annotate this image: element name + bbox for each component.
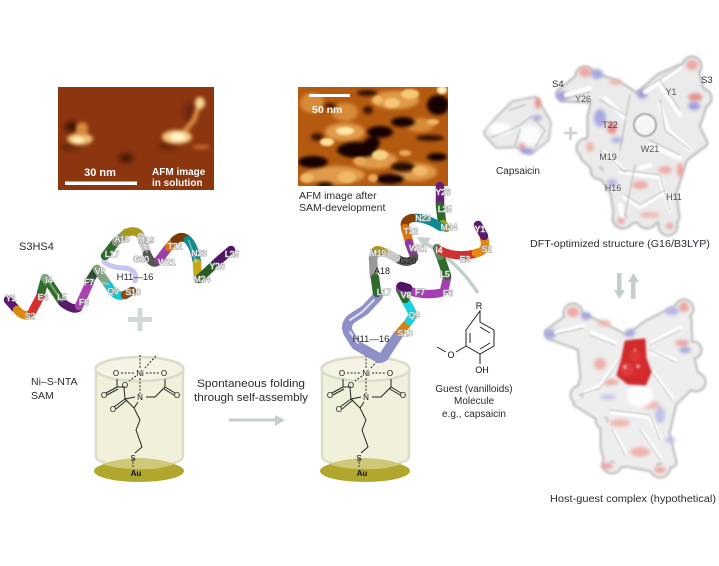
- icon: plus sign left: [128, 308, 152, 331]
- residue labels on surface: H16: [605, 183, 621, 193]
- residue labels: M24: [441, 222, 458, 232]
- label: capsaicin: Capsaicin: [496, 166, 540, 177]
- surface: host-guest complex: [544, 302, 702, 474]
- guest capsaicin: red surface: [618, 340, 650, 384]
- caption: AFM image after SAM-development: SAM-development: [299, 202, 385, 214]
- residue labels on surface: [575, 87, 682, 202]
- arrow: equilibrium down: [614, 273, 625, 299]
- molecule: NTA ligand: O: [113, 369, 119, 378]
- residue labels on surface: W21: [641, 144, 659, 154]
- caption: guest molecule: e.g., capsaicin: [442, 409, 506, 420]
- molecule: guest vanilloid: OH: [475, 365, 489, 375]
- residue labels: N23: [415, 213, 431, 223]
- icon: plus sign right: [564, 127, 577, 140]
- caption: DFT-optimized structure: DFT-optimized structure (G16/B3LYP): [530, 239, 710, 250]
- residue labels: T22: [404, 226, 419, 236]
- panel: AFM image after SAM-development: [298, 86, 449, 188]
- molecule: NTA ligand: S: [130, 454, 136, 463]
- residue labels: S2: [482, 244, 492, 254]
- residue labels: L5: [57, 292, 67, 302]
- residue labels: M19: [370, 248, 387, 258]
- molecule: NTA ligand: O: [110, 405, 116, 414]
- molecule: guest vanilloid: R: [476, 301, 483, 311]
- molecule: NTA ligand: N: [363, 393, 369, 402]
- arrow: equilibrium up: [628, 273, 639, 299]
- residue labels: M19: [138, 235, 155, 245]
- caption: AFM image after SAM-development: AFM image after: [299, 190, 377, 202]
- residue labels: Y26: [209, 261, 225, 271]
- icon: Ni-S-NTA SAM cylinder left: [94, 355, 184, 482]
- residue labels on surface: T22: [602, 120, 618, 130]
- molecule: NTA ligand: Ni: [362, 369, 370, 378]
- molecule: NTA ligand: [327, 355, 406, 478]
- residue labels: N23: [191, 248, 207, 258]
- residue labels: E3: [38, 292, 48, 302]
- residue labels: I4: [435, 245, 443, 255]
- caption: AFM image in solution: in solution: [152, 178, 203, 189]
- label: spontaneous folding: Spontaneous folding: [197, 378, 305, 390]
- surface: DFT-optimized host structure: [556, 60, 708, 232]
- molecule: NTA ligand: O: [400, 391, 406, 400]
- scale bar: 50 nm: [309, 94, 350, 97]
- molecule: guest vanilloid: [437, 301, 494, 375]
- residue labels: L17: [377, 287, 391, 297]
- chart: folded peptide helix: [347, 186, 492, 358]
- residue labels: L5: [440, 269, 450, 279]
- residue labels: Y1: [475, 224, 485, 234]
- residue labels: V8: [401, 290, 411, 300]
- caption: host-guest complex: Host-guest complex (hypothetical): [550, 494, 716, 505]
- residue labels: F7: [84, 277, 94, 287]
- chart: folded peptide helix: H11—16: [353, 334, 389, 345]
- residue labels: L17: [105, 249, 119, 259]
- molecule: NTA ligand: [101, 355, 180, 478]
- residue labels: G20: [133, 254, 149, 264]
- residue labels on surface: Y26: [575, 94, 591, 104]
- label: Ni-S-NTA SAM: SAM: [31, 390, 54, 402]
- molecule: NTA ligand: O: [122, 381, 128, 390]
- arrow: folding direction: [229, 415, 285, 426]
- molecule: NTA ligand: O: [161, 369, 167, 378]
- residue labels on surface: M19: [599, 152, 617, 162]
- molecule: NTA ligand: O: [101, 391, 107, 400]
- residue labels: Y1: [6, 293, 16, 303]
- residue labels: S2: [25, 311, 35, 321]
- molecule: NTA ligand: O: [348, 381, 354, 390]
- residue labels: Y26: [435, 187, 451, 197]
- residue labels: I4: [45, 275, 53, 285]
- residue labels: [370, 187, 492, 338]
- residue labels: L25: [438, 204, 452, 214]
- scale label: 30 nm: 30 nm: [84, 167, 116, 179]
- residue labels: L25: [225, 249, 239, 259]
- caption: guest molecule: Molecule: [454, 396, 494, 407]
- label: Ni-S-NTA SAM: Ni–S-NTA: [31, 376, 77, 388]
- molecule: guest vanilloid: O: [447, 350, 455, 360]
- panel: AFM image in solution: [58, 87, 214, 190]
- molecule: NTA ligand: Ni: [136, 369, 144, 378]
- icon: Ni-S-NTA SAM cylinder right: [320, 355, 410, 482]
- residue labels: Q9: [408, 310, 420, 320]
- residue labels: F7: [415, 287, 425, 297]
- surface: capsaicin: [488, 97, 547, 154]
- pocket: [634, 114, 656, 136]
- arrow: guest approach curve: [417, 237, 478, 293]
- residue labels: Q9: [107, 286, 119, 296]
- residue labels: S10: [397, 328, 413, 338]
- molecule: NTA ligand: Au: [131, 469, 141, 478]
- residue labels on surface: H11: [666, 192, 682, 202]
- molecule: NTA ligand: Au: [357, 469, 367, 478]
- scale label: 50 nm: 50 nm: [312, 104, 342, 116]
- label: S4: S4: [552, 79, 564, 90]
- residue labels: M24: [194, 274, 211, 284]
- residue labels: [6, 234, 239, 321]
- chart: folded peptide helix: G20: [399, 256, 417, 266]
- molecule: NTA ligand: O: [336, 405, 342, 414]
- chart: folded peptide helix: A18: [374, 266, 390, 276]
- residue labels: E3: [460, 254, 470, 264]
- molecule: NTA ligand: S: [356, 454, 362, 463]
- molecule: NTA ligand: O: [339, 369, 345, 378]
- heading: S3HS4: S3HS4: [19, 241, 54, 253]
- residue labels: T22: [168, 241, 183, 251]
- caption: AFM image in solution: AFM image: [152, 167, 206, 178]
- residue labels: F6: [79, 297, 89, 307]
- molecule: NTA ligand: O: [387, 369, 393, 378]
- residue labels on surface: Y1: [665, 87, 677, 97]
- molecule: NTA ligand: N: [137, 393, 143, 402]
- residue labels: F6: [443, 288, 453, 298]
- residue labels: S10: [125, 287, 141, 297]
- residue labels: W21: [158, 257, 176, 267]
- label: S3: S3: [701, 75, 713, 86]
- residue labels: V8: [95, 266, 105, 276]
- residue labels: A18: [114, 234, 130, 244]
- scale bar: 30 nm: [65, 182, 137, 185]
- residue labels: W21: [409, 243, 427, 253]
- molecule: NTA ligand: O: [174, 391, 180, 400]
- label: H11-16: H11—16: [117, 272, 153, 283]
- chart: unfolded peptide helix S3HS4: [6, 231, 239, 321]
- molecule: NTA ligand: O: [327, 391, 333, 400]
- label: spontaneous folding: through self-assembly: [194, 392, 309, 404]
- caption: guest molecule: Guest (vanilloids): [435, 384, 513, 395]
